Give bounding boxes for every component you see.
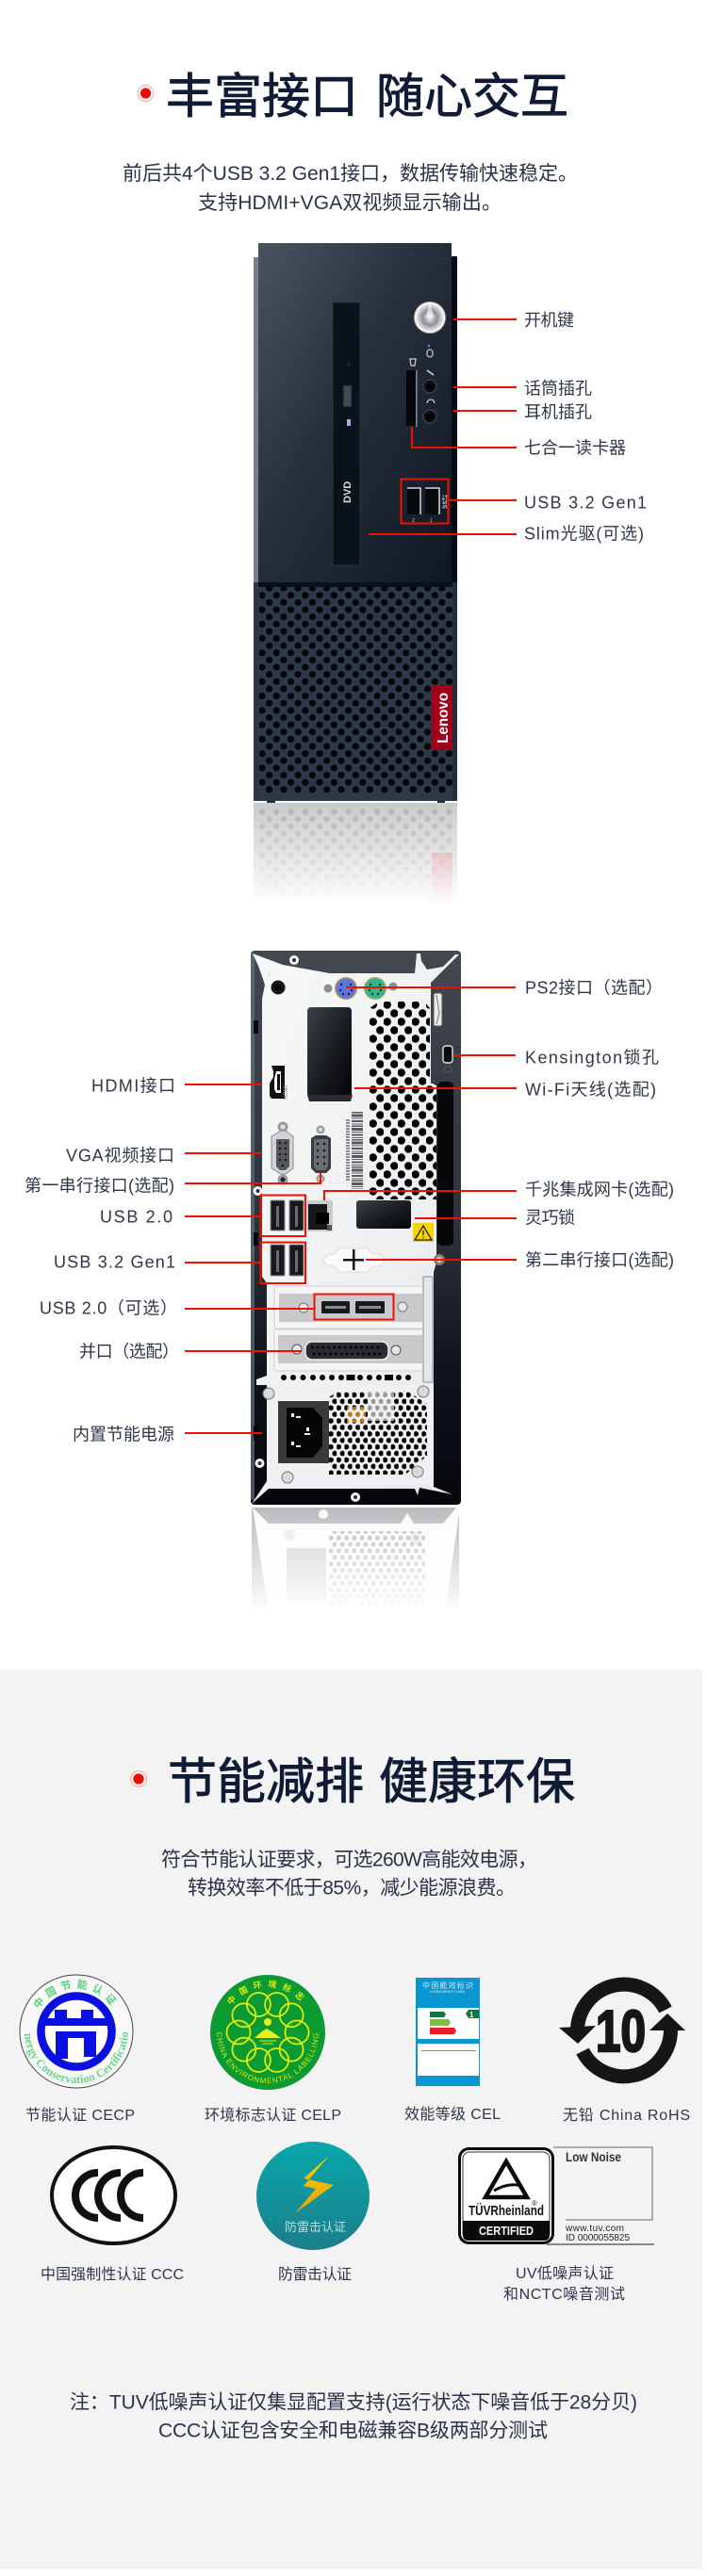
- rear metal plate: [252, 954, 459, 1504]
- badge: TUV Rheinland: [460, 2147, 654, 2244]
- badge: CECP energy conservation: 中国节能认证: [34, 1979, 117, 2007]
- lenovo badge: Lenovo: [436, 693, 452, 743]
- serial knockout with plus mark: [323, 1248, 384, 1272]
- reflection: front tower: [250, 803, 461, 912]
- front callout labels: 开机键: [524, 311, 574, 330]
- rear callout labels right: [525, 978, 674, 1270]
- badge: TUV Rheinland: ®: [532, 2199, 537, 2208]
- label: lightning protection: 防雷击认证: [278, 2266, 352, 2283]
- label: CCC: 中国强制性认证 CCC: [41, 2266, 184, 2283]
- rear callout labels left: VGA视频接口: [66, 1146, 174, 1165]
- hdmi port: [270, 1066, 289, 1100]
- warning label: [413, 1223, 434, 1242]
- rear callout labels left: USB 2.0: [100, 1208, 173, 1227]
- label: RoHS: 无铅 China RoHS: [563, 2107, 690, 2124]
- hole row: [281, 1375, 411, 1380]
- badge: TUV Rheinland: Low Noise: [566, 2150, 621, 2164]
- badge: CEL energy label: CHINA ENERGY LABEL: [430, 1990, 466, 1994]
- front callout lines: [369, 319, 517, 534]
- audio jack: [267, 969, 285, 995]
- power supply vent: [329, 1392, 427, 1475]
- rear callout labels right: Kensington锁孔: [525, 1048, 659, 1067]
- badge: China RoHS 10: [559, 1984, 685, 2077]
- rear usb highlight boxes: [260, 1195, 394, 1319]
- intro text: energy: 符合节能认证要求，可选260W高能效电源，: [161, 1849, 537, 1871]
- badge: CECP energy conservation: [19, 1975, 134, 2088]
- badge: CCC: [52, 2147, 175, 2243]
- badge: TUV Rheinland: CERTIFIED: [479, 2224, 534, 2238]
- heading: energy saving: 节能减排: [168, 1755, 364, 1810]
- front callout labels: 耳机插孔: [524, 403, 592, 422]
- case body: [254, 257, 457, 801]
- badge: CELP environmental label: [210, 1975, 325, 2090]
- rear callout labels right: Wi-Fi天线(选配): [525, 1080, 656, 1099]
- lan port: [307, 1200, 333, 1231]
- label: TUV: UV低噪声认证: [516, 2265, 614, 2282]
- rear callout labels right: PS2接口（选配）: [525, 978, 663, 997]
- rear usb 3.2 ports: [271, 1245, 304, 1276]
- rear callout labels left: HDMI接口: [91, 1076, 175, 1095]
- title dot: section 2: [130, 1771, 147, 1786]
- side rail: [423, 1277, 433, 1382]
- title dot: section 1: [138, 85, 154, 102]
- badge: lightning protection: [256, 2142, 370, 2250]
- right side strip: [452, 256, 457, 582]
- card reader: [406, 359, 418, 427]
- front usb ports: [407, 487, 449, 524]
- rear callout labels right: 灵巧锁: [525, 1208, 575, 1227]
- heading: energy saving: 健康环保: [379, 1755, 575, 1810]
- front usb highlight box: [402, 479, 449, 524]
- label: CELP: 环境标志认证 CELP: [205, 2106, 341, 2124]
- panel: rear of desktop tower: [251, 951, 461, 1505]
- rear callout labels right: 第二串行接口(选配): [525, 1251, 674, 1270]
- ventilation mesh: [254, 582, 457, 801]
- badge: TUV Rheinland: www.tuv.com: [565, 2224, 624, 2234]
- lenovo badge: [432, 686, 452, 749]
- serial port: [311, 1125, 331, 1183]
- rear usb 2.0 ports: [271, 1200, 304, 1231]
- power supply plate: [268, 1385, 433, 1484]
- left side strip: [254, 257, 258, 582]
- audio jack: ♪: [267, 969, 271, 978]
- badge: lightning protection: 防雷击认证: [285, 2220, 346, 2234]
- rear callout labels left: USB 2.0（可选）: [40, 1298, 177, 1317]
- optical drive: [333, 302, 360, 565]
- left frame highlight: [251, 954, 255, 1500]
- panel: energy saving grey background: [0, 1670, 702, 2569]
- optical drive: DVD: [342, 481, 354, 503]
- badge: TUV Rheinland: TÜVRheinland: [469, 2203, 544, 2219]
- expansion slot 2 parallel port: [274, 1329, 425, 1371]
- power led icon: [427, 345, 433, 357]
- badge: CELP environmental label: CHINA ENVIRONMENTAL LABELLING: [217, 2032, 319, 2084]
- rear callout labels left: USB 3.2 Gen1: [54, 1253, 175, 1272]
- expansion slot 1: [274, 1286, 425, 1329]
- rear callout labels left: [25, 1076, 179, 1443]
- badge: CEL energy label: [416, 1978, 480, 2086]
- rear callout labels left: 并口（选配）: [79, 1342, 179, 1361]
- section: rich ports white background: [0, 0, 707, 1670]
- label: TUV: [503, 2265, 625, 2303]
- front usb ports: 1: [430, 518, 433, 524]
- rear callout labels left: 内置节能电源: [73, 1425, 174, 1443]
- case screw holes: [253, 955, 360, 1502]
- vga port: [271, 1121, 293, 1185]
- power inlet: [278, 1401, 329, 1463]
- rear callout lines: [185, 987, 517, 1433]
- side channel: [437, 1082, 453, 1246]
- badge: CEL energy label: 1: [469, 2011, 474, 2019]
- reflection: rear tower: [250, 1506, 461, 1612]
- handle latch: [434, 993, 442, 1026]
- ps2 ports: [324, 977, 398, 1000]
- frame screw: [434, 1254, 445, 1265]
- label: CEL: 效能等级 CEL: [404, 2106, 501, 2123]
- heading: rich ports: 丰富接口: [166, 70, 358, 123]
- kensington slot: [443, 1046, 452, 1072]
- badge: China RoHS 10: 10: [596, 1999, 646, 2064]
- badge: CEL energy label: 中国能效标识: [422, 1981, 473, 1990]
- rear case frame: [251, 951, 461, 1505]
- footnote: 注：TUV低噪声认证仅集显配置支持(运行状态下噪音低于28分贝): [70, 2391, 637, 2414]
- feet: [267, 801, 445, 803]
- footnote: [70, 2391, 637, 2442]
- label: CECP: 节能认证 CECP: [25, 2107, 135, 2124]
- wifi antenna block: [307, 1007, 353, 1101]
- rear callout labels right: 千兆集成网卡(选配): [525, 1180, 674, 1198]
- footnote: CCC认证包含安全和电磁兼容B级两部分测试: [158, 2420, 548, 2442]
- front callout labels: Slim光驱(可选): [524, 524, 644, 543]
- headphone jack: [423, 399, 436, 423]
- heading: rich ports: 随心交互: [376, 70, 568, 123]
- intro text: energy: [161, 1849, 537, 1899]
- vent grill: [370, 1002, 436, 1199]
- front usb ports: SS⇆: [440, 494, 449, 509]
- intro text: ports: 前后共4个USB 3.2 Gen1接口，数据传输快速稳定。: [123, 163, 578, 185]
- front callout labels: 话筒插孔: [524, 379, 592, 398]
- intro text: ports: [123, 163, 578, 214]
- front callout labels: [524, 311, 647, 543]
- intro text: energy: 转换效率不低于85%，减少能源浪费。: [188, 1877, 516, 1899]
- power button: [413, 302, 447, 334]
- panel: front of desktop tower: [254, 243, 457, 803]
- psu screws: [263, 1386, 429, 1483]
- flex lock block: [356, 1200, 411, 1229]
- front panel: [258, 243, 452, 582]
- front usb ports: 2: [412, 518, 415, 524]
- front callout labels: USB 3.2 Gen1: [524, 494, 647, 513]
- badge: CELP environmental label: 中国环境标志: [227, 1980, 305, 2004]
- intro text: ports: 支持HDMI+VGA双视频显示输出。: [198, 192, 501, 214]
- front callout labels: 七合一读卡器: [524, 439, 626, 458]
- barcode sticker: [348, 1112, 357, 1189]
- rear callout labels left: 第一串行接口(选配): [25, 1176, 174, 1195]
- black frame slots: [254, 1020, 259, 1441]
- microphone jack: [423, 370, 436, 393]
- label: TUV: 和NCTC噪音测试: [503, 2286, 625, 2303]
- hdmi port: HDMI: [284, 1084, 289, 1100]
- badge: TUV Rheinland: ID 0000055825: [566, 2233, 630, 2243]
